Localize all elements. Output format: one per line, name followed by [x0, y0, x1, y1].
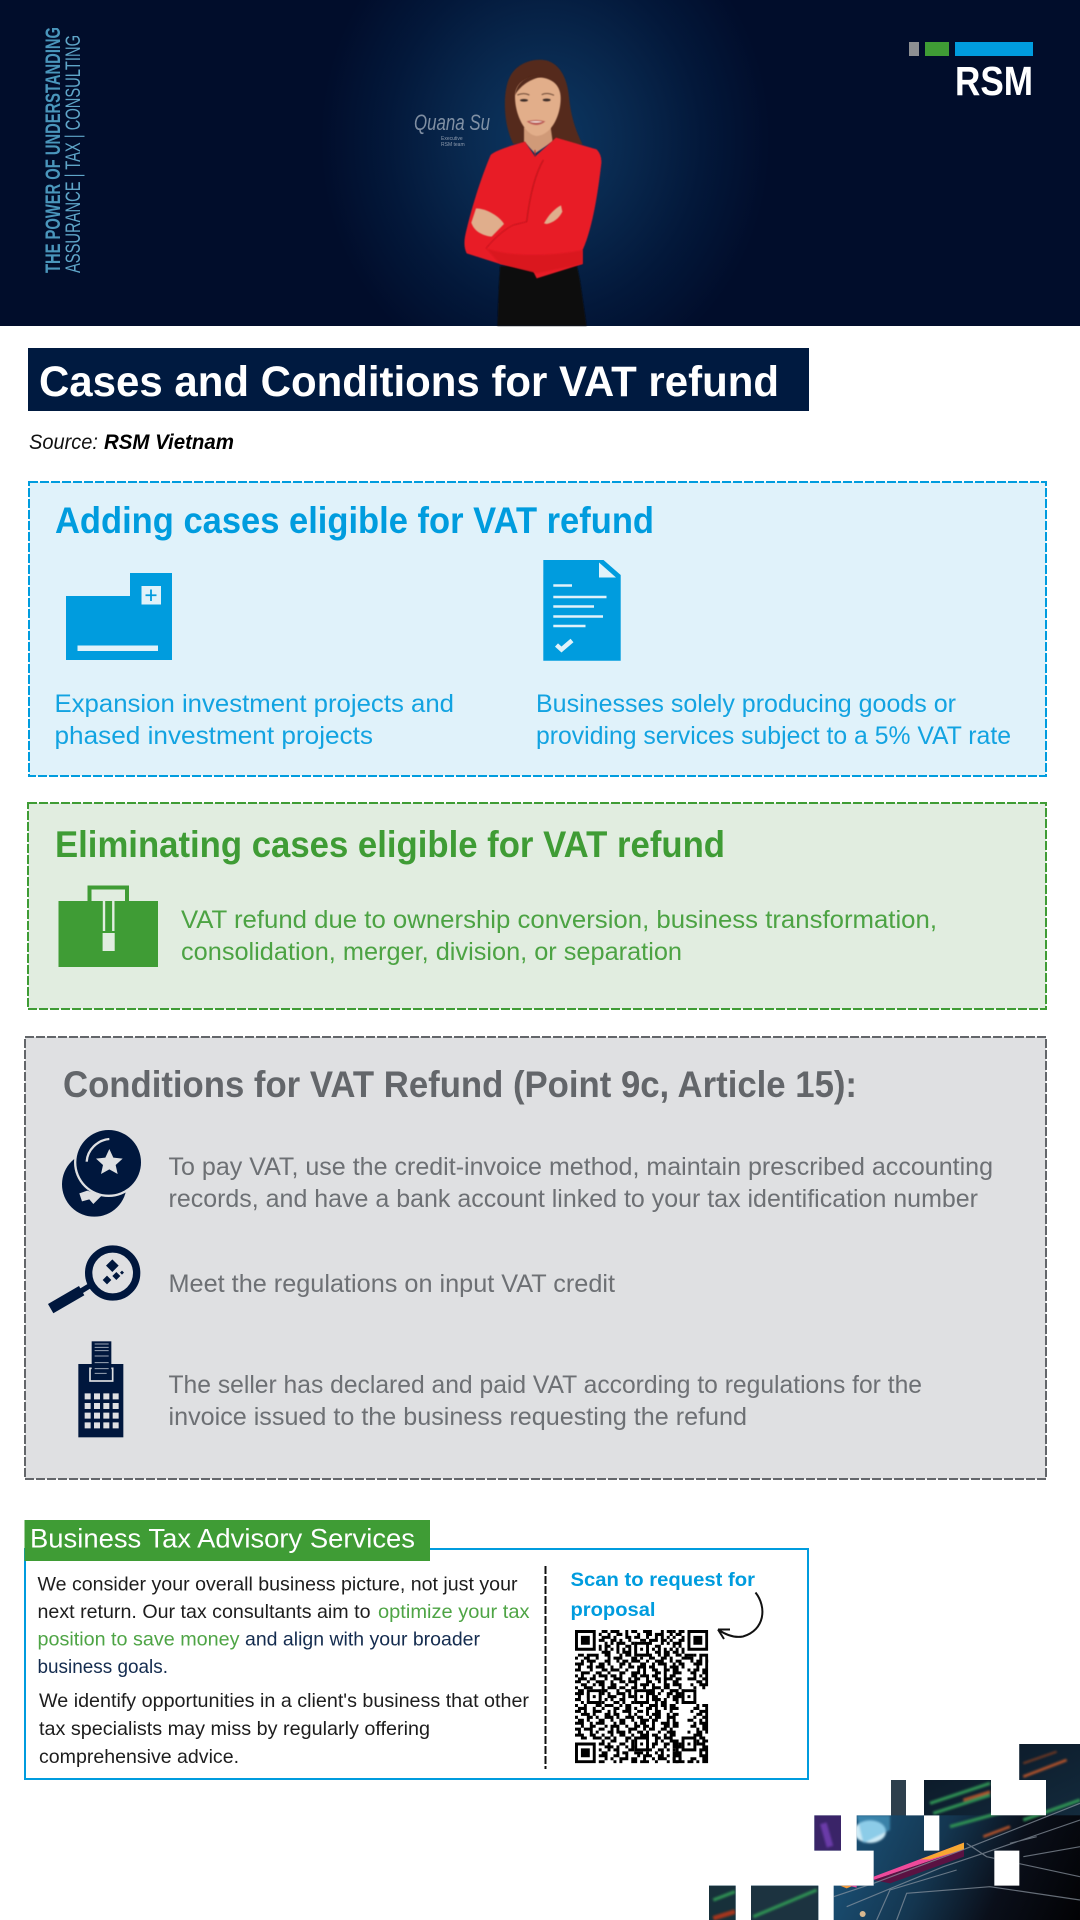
RSM logo	[909, 42, 1033, 104]
heading tab: Business Tax Advisory Services	[30, 1524, 415, 1554]
text: first paragraph: position to save money	[38, 1628, 240, 1650]
icon: printing calculator	[78, 1341, 123, 1437]
text: seller condition: invoice issued to the business requesting the refund	[168, 1403, 747, 1431]
portrait of woman in red jacket	[464, 60, 601, 326]
RSM logo: RSM	[955, 58, 1033, 104]
heading: conditions: Conditions for VAT Refund (Point 9c, Article 15):	[63, 1064, 857, 1105]
text: first paragraph: next return. Our tax consultants aim to	[38, 1601, 371, 1623]
signature	[414, 110, 490, 148]
text: first paragraph: and align with your broader	[245, 1628, 480, 1650]
text: credit-invoice condition: records, and have a bank account linked to your tax identification number	[168, 1185, 978, 1213]
signature: RSM team	[441, 142, 465, 148]
text: credit-invoice condition: To pay VAT, use the credit-invoice method, maintain prescribed accounting	[168, 1153, 993, 1181]
signature: Executive	[441, 136, 463, 142]
source line: RSM Vietnam	[104, 431, 234, 454]
text: expansion projects: Expansion investment projects and	[54, 690, 454, 718]
text: scan prompt	[570, 1569, 755, 1621]
text: refund elimination: VAT refund due to ownership conversion, business transformation,	[181, 906, 937, 934]
tagline: vertical text	[42, 27, 85, 273]
text: seller condition: The seller has declared and paid VAT according to regulations for the	[168, 1371, 922, 1399]
panel: business tax advisory services	[24, 1520, 808, 1779]
text: expansion projects	[54, 690, 454, 750]
source line: Source:	[29, 431, 98, 454]
text: first paragraph	[38, 1574, 530, 1678]
icon: folder with plus	[66, 573, 172, 660]
panel: conditions	[25, 1037, 1046, 1479]
text: first paragraph: We consider your overall business picture, not just your	[38, 1574, 518, 1596]
source line	[29, 431, 234, 454]
text: scan prompt: Scan to request for	[570, 1569, 755, 1591]
title bar: Cases and Conditions for VAT refund	[39, 358, 779, 406]
heading: eliminating cases: Eliminating cases eligible for VAT refund	[55, 824, 725, 865]
text: first paragraph: optimize your tax	[378, 1601, 530, 1623]
text: second paragraph: We identify opportunities in a client's business that other	[39, 1690, 530, 1712]
text: 5% VAT businesses	[536, 690, 1011, 750]
decorative circuit image	[690, 1740, 1080, 1920]
icon: two medals	[62, 1128, 143, 1217]
text: seller condition	[168, 1371, 922, 1431]
text: scan prompt: proposal	[570, 1599, 656, 1621]
text: first paragraph: business goals.	[38, 1656, 168, 1678]
text: 5% VAT businesses: providing services subject to a 5% VAT rate	[536, 722, 1011, 750]
text: expansion projects: phased investment projects	[54, 722, 373, 750]
text: second paragraph	[39, 1690, 530, 1768]
icon: document with check	[543, 560, 621, 661]
text: credit-invoice condition	[168, 1153, 993, 1213]
right-hand QR modules	[670, 1631, 711, 1762]
text: refund elimination	[181, 906, 937, 966]
text: second paragraph: comprehensive advice.	[39, 1746, 239, 1768]
text: second paragraph: tax specialists may miss by regularly offering	[39, 1718, 430, 1740]
header banner	[0, 0, 1080, 326]
icon: briefcase	[58, 888, 158, 967]
signature: Quana Su	[414, 110, 490, 135]
panel: adding cases	[29, 482, 1046, 776]
text: input VAT credit: Meet the regulations on input VAT credit	[168, 1270, 615, 1298]
arrow to QR code	[718, 1592, 762, 1639]
icon: magnifying glass	[51, 1249, 137, 1309]
heading tab	[24, 1520, 430, 1561]
heading: adding cases: Adding cases eligible for VAT refund	[55, 500, 654, 541]
text: refund elimination: consolidation, merger, division, or separation	[181, 938, 682, 966]
QR code	[575, 1630, 711, 1763]
panel: eliminating cases	[28, 803, 1046, 1009]
text: 5% VAT businesses: Businesses solely producing goods or	[536, 690, 956, 718]
divider	[544, 1566, 546, 1769]
